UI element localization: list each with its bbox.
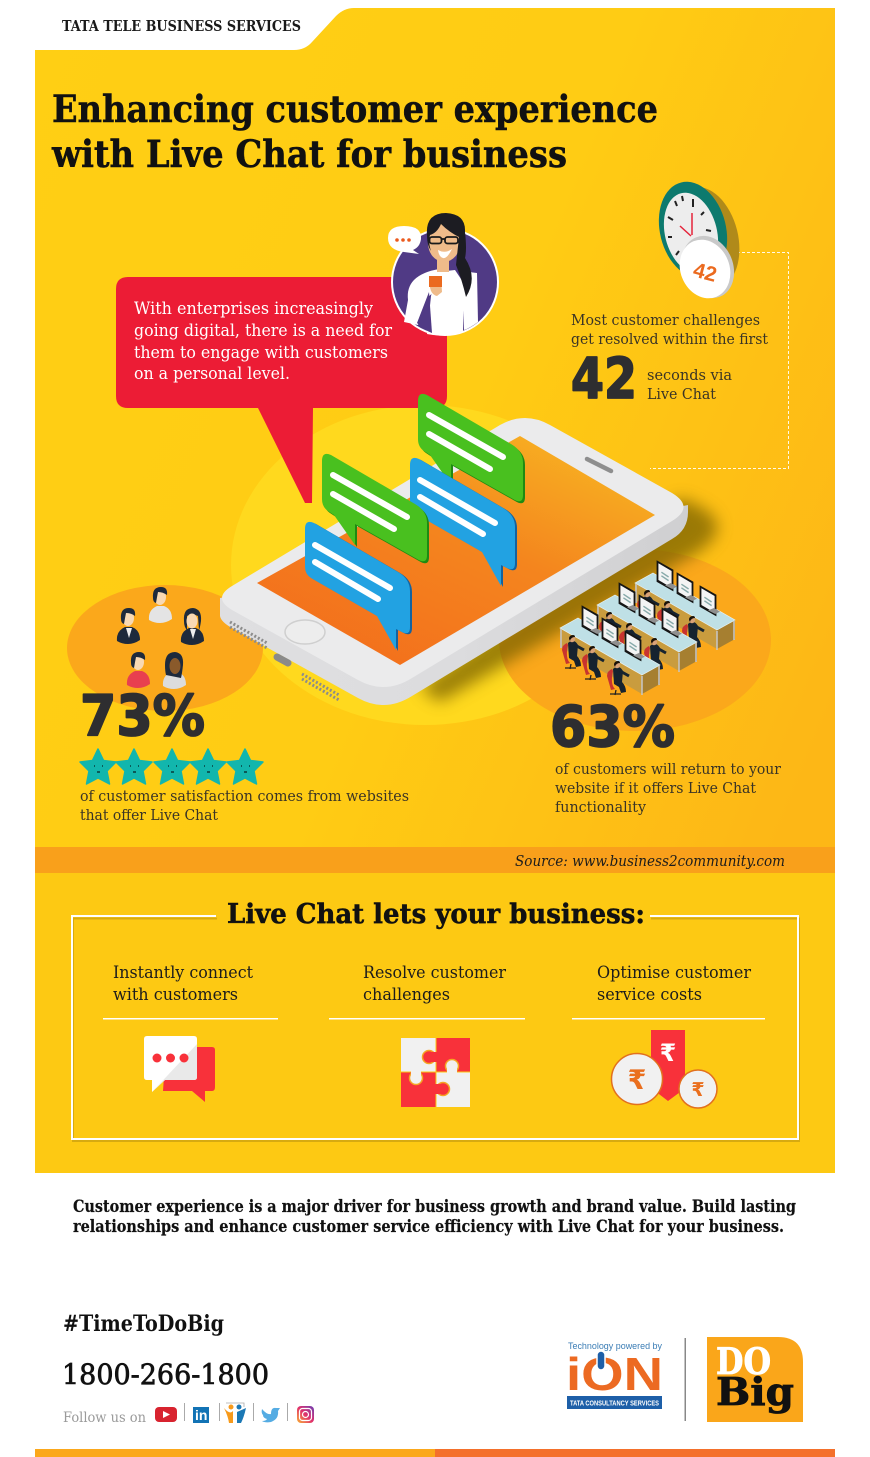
stat: 42 seconds (571, 311, 768, 412)
text: return customers: of customers will return to your (555, 760, 782, 778)
benefit: resolve (329, 963, 525, 1020)
icon: twitter (262, 1408, 280, 1422)
callout text: With enterprises increasingly (134, 299, 374, 318)
icon: instagram (297, 1406, 314, 1423)
woman's phone (429, 276, 442, 287)
phone home button (285, 620, 325, 644)
logo: Do Big: Big (716, 1369, 794, 1414)
source bar (35, 847, 835, 873)
icon: sharing people (224, 1403, 246, 1423)
stat: 42 seconds: 42 (571, 347, 637, 412)
phone screen (257, 436, 655, 665)
benefits heading: Live Chat lets your business: (227, 899, 645, 930)
logo: iON: iON (566, 1348, 663, 1400)
benefit: connect: with customers (113, 985, 238, 1004)
closing statement: relationships and enhance customer service efficiency with Live Chat for your business. (73, 1217, 784, 1236)
blue bubble back (410, 458, 517, 587)
icon: five star rating (80, 749, 263, 784)
follow us label: Follow us on (63, 1410, 146, 1426)
illustration: woman with phone (388, 213, 498, 335)
callout text: them to engage with customers (134, 343, 388, 362)
text: satisfaction: of customer satisfaction comes from websites (80, 787, 409, 805)
text: satisfaction (80, 787, 409, 824)
clock label: 42 (691, 259, 719, 287)
icon: rupee savings: ₹ (628, 1065, 646, 1096)
icon: chat bubbles (144, 1036, 215, 1102)
icon: rupee savings: ₹ (691, 1079, 705, 1101)
social icons (155, 1403, 314, 1423)
speech bubble with dots (388, 226, 421, 254)
benefit: optimise (572, 963, 765, 1020)
phone bottom speakers and port (230, 622, 339, 700)
stat: 63%: 63% (550, 695, 675, 760)
green bubble front (322, 454, 429, 563)
hashtag: #TimeToDoBig (63, 1311, 224, 1337)
callout text: going digital, there is a need for (134, 321, 392, 340)
stat: 42 seconds: seconds via (647, 366, 732, 384)
benefit: connect: Instantly connect (113, 963, 253, 982)
logo: iON: Technology powered by (568, 1341, 662, 1351)
title: Enhancing customer experience (52, 87, 658, 131)
benefit: resolve: challenges (363, 985, 450, 1004)
source bar: Source: www.business2community.com (515, 852, 785, 870)
brand name: TATA TELE BUSINESS SERVICES (62, 18, 301, 35)
benefit: optimise: Optimise customer (597, 963, 751, 982)
icon: clock (649, 174, 750, 306)
icon: rupee savings: ₹ (660, 1039, 676, 1067)
text: return customers (555, 760, 782, 816)
benefits frame (73, 918, 799, 1141)
divider between logos (684, 1338, 686, 1421)
stat: 42 seconds: Most customer challenges (571, 311, 760, 329)
green bubble back (418, 394, 525, 503)
title: with Live Chat for business (51, 132, 567, 176)
footer colour bar (35, 1449, 835, 1457)
title (51, 87, 658, 176)
stat: 73%: 73% (80, 684, 205, 749)
background ellipse: orange right (499, 549, 771, 731)
customer bottom left (127, 652, 150, 688)
icon: rupee savings (612, 1030, 717, 1108)
background ellipse: orange left (67, 585, 263, 711)
customer left (117, 608, 140, 644)
icon: group of customers (117, 587, 204, 689)
customer bottom right (163, 652, 186, 689)
phone shadow (420, 498, 717, 702)
dashed connector box (650, 252, 788, 468)
text: satisfaction: that offer Live Chat (80, 806, 218, 824)
icon: puzzle pieces (401, 1038, 470, 1107)
illustration: call centre desks (560, 560, 735, 695)
benefit: optimise: service costs (597, 985, 702, 1004)
callout: red speech bubble (116, 277, 447, 503)
header tab with brand name (35, 8, 354, 50)
logo: iON (566, 1341, 663, 1409)
blue bubble front (305, 522, 412, 651)
customer right (181, 608, 204, 645)
logo: Do Big: DO (716, 1341, 771, 1383)
text: return customers: website if it offers Live Chat (555, 779, 756, 797)
closing statement (73, 1197, 796, 1236)
icon: linkedin: in (195, 1407, 207, 1423)
phone number: 1800-266-1800 (62, 1358, 269, 1391)
icon: youtube (155, 1407, 177, 1422)
benefit: resolve: Resolve customer (363, 963, 506, 982)
benefit: connect (103, 963, 278, 1020)
glasses (430, 237, 458, 244)
illustration: chat bubbles on phone (305, 394, 525, 651)
logo: Do Big (707, 1337, 803, 1422)
phone speaker (587, 459, 611, 471)
panel: live chat benefits (35, 873, 835, 1173)
background ellipse: yellow glow behind phone (231, 405, 619, 725)
logo: iON: TATA CONSULTANCY SERVICES (570, 1398, 659, 1408)
stat: 42 seconds: get resolved within the first (571, 330, 768, 348)
stat: 42 seconds: Live Chat (647, 385, 716, 403)
panel: yellow main background (35, 8, 835, 1173)
callout text: on a personal level. (134, 364, 290, 383)
callout text (134, 299, 392, 383)
text: return customers: functionality (555, 798, 646, 816)
illustration: smartphone (220, 418, 688, 705)
customer top (149, 587, 172, 623)
